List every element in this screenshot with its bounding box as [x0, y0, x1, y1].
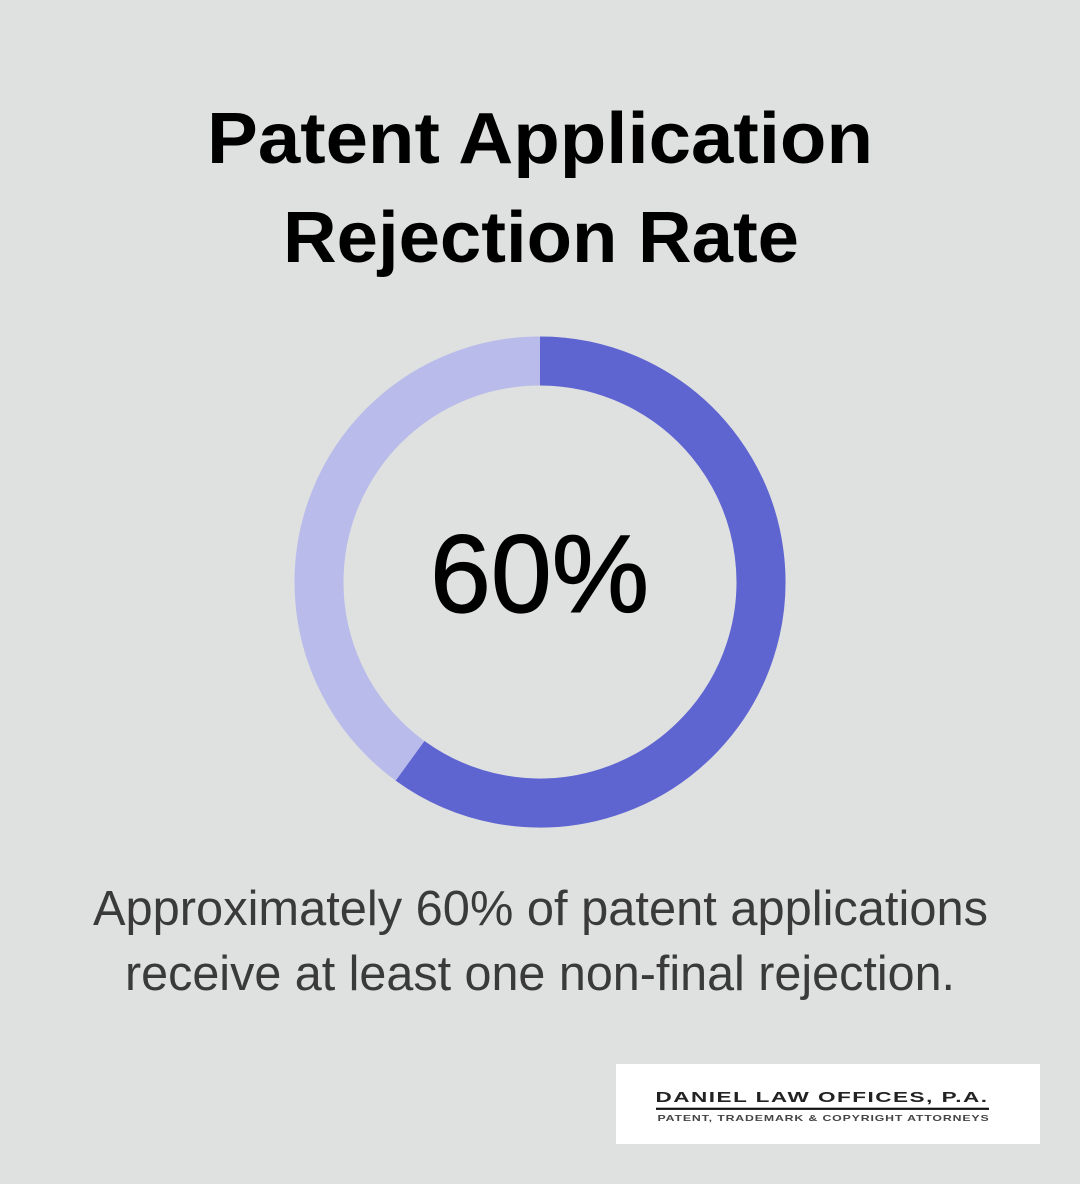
- title: Patent Application: [207, 99, 873, 179]
- logo: Daniel Law Offices: PATENT, TRADEMARK & COPYRIGHT ATTORNEYS: [658, 1113, 990, 1123]
- donut chart: 60%: [319, 361, 761, 803]
- description text: [93, 882, 988, 1001]
- description text: Approximately 60% of patent applications: [93, 882, 988, 936]
- center value: 60%: [430, 513, 649, 636]
- title: Rejection Rate: [283, 198, 799, 278]
- logo: Daniel Law Offices: DANIEL LAW OFFICES, P.A.: [656, 1089, 988, 1106]
- logo: Daniel Law Offices: [616, 1064, 1040, 1144]
- description text: receive at least one non-final rejection.: [125, 947, 955, 1001]
- title: [207, 99, 873, 278]
